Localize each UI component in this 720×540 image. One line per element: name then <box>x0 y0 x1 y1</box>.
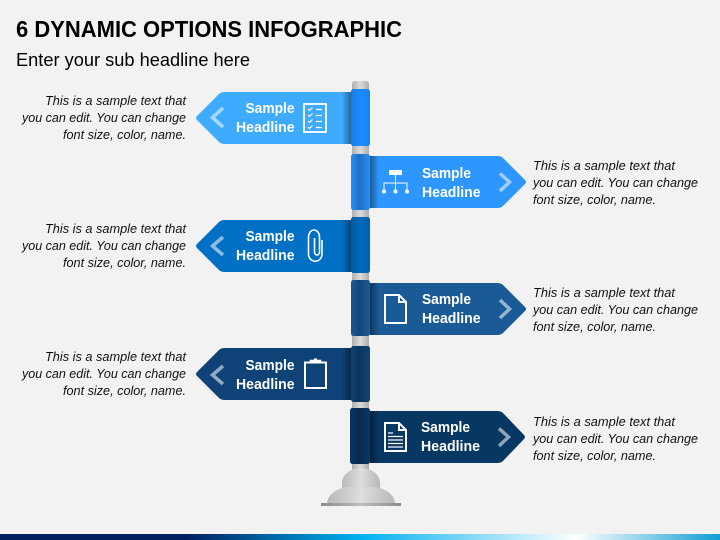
bottom gradient bar <box>0 534 720 540</box>
arrow sign 1 <box>196 92 352 144</box>
headline 5: Headline <box>236 377 294 393</box>
headline 1 <box>236 101 294 136</box>
headline 2: Headline <box>422 185 480 201</box>
headline 4 <box>422 292 480 327</box>
chevron 4 <box>500 300 510 318</box>
icon: clipboard <box>305 358 326 388</box>
headline 5 <box>236 358 294 393</box>
arrow sign 5 <box>196 348 352 400</box>
chevron 6 <box>499 428 508 446</box>
description 2: This is a sample text that <box>533 159 676 173</box>
wrap band 1 <box>351 89 370 146</box>
description 5: you can edit. You can change <box>21 367 186 381</box>
wrap band 2 <box>351 154 370 210</box>
description 3: font size, color, name. <box>63 256 186 270</box>
arrow sign 4 <box>370 283 526 335</box>
signpost pole and base <box>321 81 401 506</box>
description 5: font size, color, name. <box>63 384 186 398</box>
icon: checklist <box>304 104 326 132</box>
description 2: you can edit. You can change <box>532 176 698 190</box>
chevron 2 <box>500 174 510 191</box>
chevron 3 <box>212 237 223 255</box>
description 1: font size, color, name. <box>63 128 186 142</box>
description 6: you can edit. You can change <box>532 432 698 446</box>
description 2 <box>532 159 698 207</box>
option 3 <box>21 217 370 273</box>
description 6: This is a sample text that <box>533 415 676 429</box>
description 4: font size, color, name. <box>533 320 656 334</box>
headline 2 <box>422 166 480 201</box>
description 1 <box>21 94 187 142</box>
arrow sign 6 <box>370 411 525 463</box>
icon: text document <box>385 423 406 451</box>
chevron 5 <box>212 366 223 384</box>
arrow sign 2 <box>370 156 526 208</box>
description 6: font size, color, name. <box>533 449 656 463</box>
headline 4: Sample <box>422 292 471 308</box>
description 1: you can edit. You can change <box>21 111 186 125</box>
icon: paperclip <box>308 230 322 261</box>
headline 1: Headline <box>236 120 294 136</box>
headline 3: Sample <box>246 229 294 245</box>
chevron 1 <box>212 108 223 127</box>
headline 4: Headline <box>422 311 480 327</box>
headline 6: Headline <box>421 439 480 455</box>
wrap band 6 <box>350 408 370 464</box>
option 5 <box>21 346 370 402</box>
description 5: This is a sample text that <box>45 350 187 364</box>
wrap band 4 <box>351 280 370 336</box>
description 4 <box>532 286 698 334</box>
description 4: you can edit. You can change <box>532 303 698 317</box>
description 2: font size, color, name. <box>533 193 656 207</box>
description 5 <box>21 350 187 398</box>
option 2 <box>351 154 698 210</box>
headline 5: Sample <box>246 358 294 374</box>
headline 2: Sample <box>422 166 471 182</box>
option 6 <box>350 408 698 464</box>
title: 6 DYNAMIC OPTIONS INFOGRAPHIC <box>16 16 402 42</box>
wrap band 5 <box>351 346 370 402</box>
description 1: This is a sample text that <box>45 94 187 108</box>
icon: document <box>385 295 406 323</box>
headline 3: Headline <box>236 248 294 264</box>
headline 3 <box>236 229 294 264</box>
headline 1: Sample <box>246 101 294 117</box>
description 4: This is a sample text that <box>533 286 676 300</box>
arrow sign 3 <box>196 220 352 272</box>
description 3: This is a sample text that <box>45 222 187 236</box>
icon: org chart <box>382 170 409 194</box>
description 6 <box>532 415 698 463</box>
headline 6: Sample <box>421 420 470 436</box>
option 1 <box>21 89 370 146</box>
description 3 <box>21 222 187 270</box>
sub headline: Enter your sub headline here <box>16 50 250 70</box>
description 3: you can edit. You can change <box>21 239 186 253</box>
wrap band 3 <box>351 217 370 273</box>
headline 6 <box>421 420 480 455</box>
option 4 <box>351 280 698 336</box>
